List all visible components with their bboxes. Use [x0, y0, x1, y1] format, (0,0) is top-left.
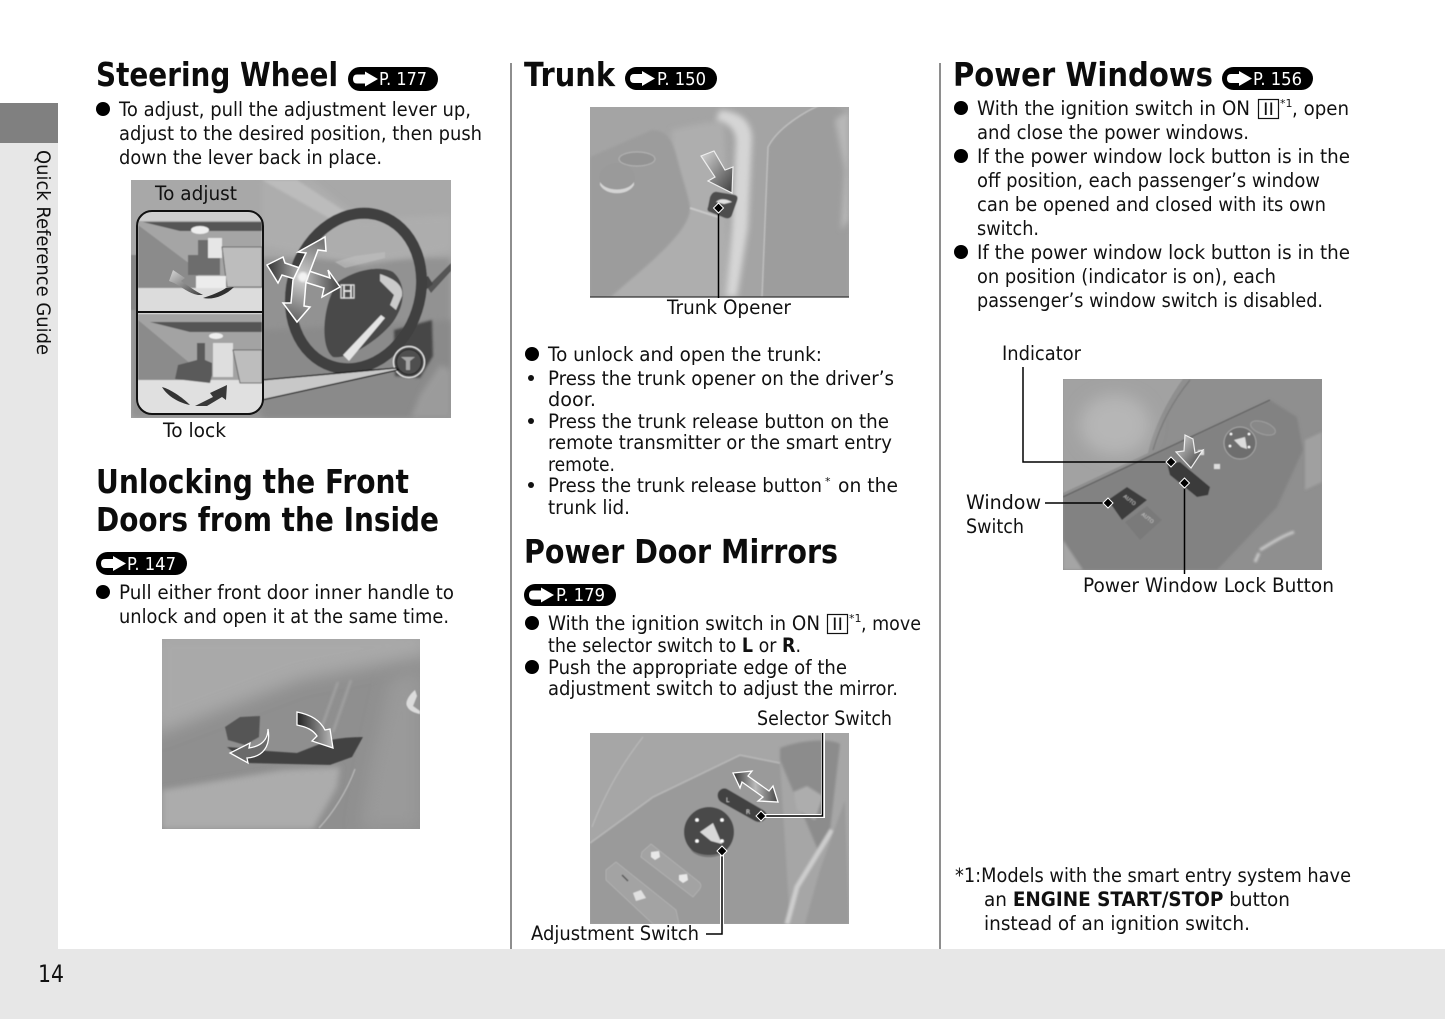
illustration: mirror switches: R	[746, 809, 750, 816]
instruction text: trunk	[525, 343, 898, 519]
instruction text: power windows: on position (indicator is on), each	[977, 265, 1276, 288]
panel: unlocking the front doors	[96, 462, 454, 829]
callout: lock button pointer	[1180, 478, 1190, 574]
instruction text: mirrors: II	[832, 615, 843, 635]
callout: indicator pointer	[1023, 367, 1176, 467]
footnote	[955, 864, 1351, 935]
page reference badge: P. 147	[96, 552, 187, 575]
instruction text: power windows: passenger’s window switch is disabled.	[977, 289, 1323, 312]
page reference badge: P. 150	[625, 67, 717, 90]
label: indicator: Indicator	[1002, 342, 1082, 365]
left sidebar band	[0, 103, 58, 1019]
heading: trunk: Trunk	[524, 55, 616, 94]
page reference badge: P. 177	[348, 67, 438, 91]
instruction text: trunk: trunk lid.	[548, 496, 630, 519]
instruction text: power windows: If the power window lock button is in the	[977, 241, 1350, 264]
instruction text: trunk: Press the trunk release button	[548, 474, 822, 497]
illustration: trunk opener	[590, 103, 849, 299]
instruction text: power windows: switch.	[977, 217, 1039, 240]
illustration: window switches	[1023, 367, 1322, 574]
page reference badge: P. 156	[1222, 67, 1313, 90]
page reference badge: P. 150: P. 150	[657, 69, 706, 90]
instruction text: steering wheel	[96, 98, 482, 169]
sidebar label: Quick Reference Guide	[32, 150, 54, 355]
instruction text: trunk: remote transmitter or the smart entry	[548, 431, 892, 454]
instruction text: mirrors: Push the appropriate edge of the	[548, 656, 847, 679]
icon: left-right selector arrow	[733, 771, 778, 802]
heading: unlocking the front doors: Unlocking the Front	[96, 462, 409, 501]
instruction text: power windows: , open	[1292, 97, 1349, 120]
instruction text: power windows	[954, 97, 1350, 312]
heading: unlocking the front doors: Doors from the Inside	[96, 500, 439, 539]
instruction text: mirrors: the selector switch to L or R.	[548, 634, 801, 657]
illustration: mirror switches: L	[726, 797, 730, 804]
panel: power windows	[953, 55, 1351, 935]
instruction text: steering wheel: down the lever back in place.	[119, 146, 382, 169]
footnote: instead of an ignition switch.	[984, 912, 1250, 935]
footnote: an ENGINE START/STOP button	[984, 888, 1290, 911]
label: to adjust: To adjust	[154, 182, 237, 205]
label: window switch	[966, 491, 1041, 538]
illustration: mirror switches	[590, 733, 849, 934]
icon: lever arrows	[162, 270, 234, 406]
instruction text: mirrors	[525, 612, 921, 700]
instruction text: door handle: Pull either front door inner handle to	[119, 581, 454, 604]
heading: power windows: Power Windows	[953, 55, 1213, 94]
page reference badge: P. 179	[524, 584, 616, 606]
callout: adjustment switch pointer	[706, 846, 727, 934]
instruction text: trunk: on the	[838, 474, 898, 497]
instruction text: trunk: door.	[548, 388, 596, 411]
page reference badge: P. 177: P. 177	[379, 69, 427, 90]
page number: 14	[38, 960, 64, 988]
illustration: window switches: AUTO	[1140, 512, 1155, 525]
instruction text: power windows: can be opened and closed with its own	[977, 193, 1326, 216]
instruction text: trunk: Press the trunk opener on the driver’s	[548, 367, 894, 390]
label: trunk opener: Trunk Opener	[666, 296, 792, 319]
instruction text: power windows: With the ignition switch in ON	[977, 97, 1250, 120]
illustration: door inner handle	[162, 639, 420, 829]
instruction text: power windows: and close the power windows.	[977, 121, 1249, 144]
label: to lock: To lock	[162, 419, 227, 442]
illustration: window switches: AUTO	[1122, 494, 1137, 507]
instruction text: mirrors: *1	[849, 612, 862, 625]
bottom footer band	[0, 949, 1445, 1019]
heading: steering wheel: Steering Wheel	[96, 55, 338, 94]
instruction text: steering wheel: adjust to the desired position, then push	[119, 122, 482, 145]
instruction text: mirrors: With the ignition switch in ON	[548, 612, 820, 635]
icon: steering adjust arrows	[267, 237, 340, 322]
label: window switch: Window	[966, 491, 1041, 514]
sidebar section tab	[0, 103, 58, 143]
instruction text: mirrors: adjustment switch to adjust the mirror.	[548, 677, 898, 700]
instruction text: power windows: If the power window lock button is in the	[977, 145, 1350, 168]
instruction text: power windows: II	[1263, 100, 1274, 120]
label: power window lock button: Power Window Lock Button	[1083, 574, 1334, 597]
instruction text: trunk: remote.	[548, 453, 615, 476]
instruction text: power windows: *1	[1280, 97, 1292, 110]
icon: press arrow	[701, 151, 733, 193]
instruction text: steering wheel: To adjust, pull the adjustment lever up,	[118, 98, 471, 121]
inset: lever positions	[137, 211, 263, 414]
page reference badge: P. 156: P. 156	[1253, 69, 1302, 90]
callout: window switch pointer	[1045, 498, 1113, 508]
panel: trunk	[524, 55, 898, 519]
panel: steering wheel	[96, 55, 482, 442]
page reference badge: P. 147: P. 147	[127, 554, 176, 575]
illustration: steering wheel adjustment	[131, 180, 451, 418]
instruction text: trunk: To unlock and open the trunk:	[547, 343, 822, 366]
footnote: *1:Models with the smart entry system have	[955, 864, 1351, 887]
instruction text: trunk: Press the trunk release button on the	[548, 410, 889, 433]
instruction text: trunk: *	[825, 475, 831, 488]
callout: selector switch pointer	[756, 733, 823, 821]
instruction text: door handle: unlock and open it at the same time.	[119, 605, 449, 628]
heading: unlocking the front doors	[96, 462, 439, 539]
icon: press arrow	[1176, 435, 1203, 468]
heading: power door mirrors: Power Door Mirrors	[524, 532, 838, 571]
instruction text: power windows: off position, each passenger’s window	[977, 169, 1320, 192]
label: selector switch: Selector Switch	[757, 707, 892, 730]
instruction text: door handle	[96, 581, 454, 628]
instruction text: mirrors: , move	[861, 612, 921, 635]
page reference badge: P. 179: P. 179	[556, 585, 605, 606]
label: adjustment switch: Adjustment Switch	[531, 922, 699, 945]
label: window switch: Switch	[966, 515, 1024, 538]
icon: release arrows	[230, 712, 333, 763]
callout: trunk opener pointer	[714, 203, 724, 298]
panel: power door mirrors	[524, 532, 921, 945]
